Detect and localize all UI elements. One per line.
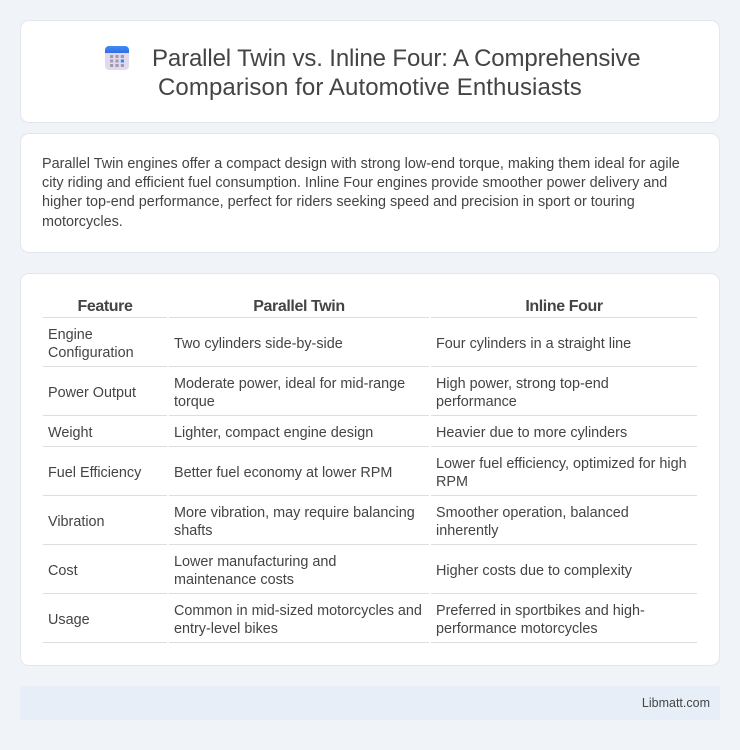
row: Weight: Lighter, compact engine design [174, 425, 373, 441]
row: Fuel Efficiency: Better fuel economy at lower RPM [174, 465, 392, 481]
row: Power Output: High power, strong top-end [436, 376, 609, 392]
row: Usage: performance motorcycles [436, 621, 598, 637]
summary text: Parallel Twin engines offer a compact design with strong low-end torque, making them ideal for agile [42, 156, 680, 172]
row: Power Output: Power Output [48, 385, 136, 401]
row: Usage: Preferred in sportbikes and high- [436, 603, 645, 619]
title panel [20, 20, 720, 123]
title [152, 45, 640, 101]
row: Power Output: performance [436, 394, 517, 410]
row: Engine Configuration: Engine [48, 327, 93, 343]
row: Fuel Efficiency: Fuel Efficiency [48, 465, 141, 481]
icon: calendar [105, 46, 129, 70]
row: Cost: Lower manufacturing and [174, 554, 336, 570]
row: Usage: Common in mid-sized motorcycles and [174, 603, 422, 619]
row: Weight: Weight [48, 425, 93, 441]
row: Vibration: Vibration [48, 514, 105, 530]
table header: Parallel Twin: Parallel Twin [253, 298, 345, 315]
summary text [42, 156, 680, 230]
row: Usage: Usage [48, 612, 90, 628]
row: Engine Configuration: Configuration [48, 345, 134, 361]
summary text: city riding and efficient fuel consumption. Inline Four engines provide smoother power delivery and [42, 175, 667, 191]
row: Vibration: More vibration, may require balancing [174, 505, 415, 521]
row: Power Output: torque [174, 394, 215, 410]
row: Usage [48, 603, 645, 637]
row: Engine Configuration: Four cylinders in a straight line [436, 336, 631, 352]
row: Vibration [48, 505, 629, 539]
comparison table panel [20, 273, 720, 666]
table header: Inline Four: Inline Four [525, 298, 603, 315]
row: Power Output [48, 376, 609, 410]
row: Engine Configuration: Two cylinders side-by-side [174, 336, 343, 352]
row: Usage: entry-level bikes [174, 621, 278, 637]
row: Engine Configuration [48, 327, 631, 361]
row: Weight: Heavier due to more cylinders [436, 425, 627, 441]
row: Cost [48, 554, 632, 588]
summary text: higher top-end performance, perfect for riders seeking speed and precision in sport or touring [42, 194, 635, 210]
row: Cost: Cost [48, 563, 78, 579]
summary panel [20, 133, 720, 253]
row: Fuel Efficiency: RPM [436, 474, 468, 490]
row: Fuel Efficiency: Lower fuel efficiency, optimized for high [436, 456, 687, 472]
summary text: motorcycles. [42, 214, 123, 230]
footer credit: Libmatt.com [642, 696, 710, 710]
table header: Feature: Feature [78, 298, 132, 315]
row: Fuel Efficiency [48, 456, 687, 490]
row: Vibration: inherently [436, 523, 498, 539]
row: Cost: maintenance costs [174, 572, 294, 588]
title: Comparison for Automotive Enthusiasts [158, 74, 582, 101]
title: Parallel Twin vs. Inline Four: A Comprehensive [152, 45, 640, 72]
row: Cost: Higher costs due to complexity [436, 563, 632, 579]
row: Vibration: shafts [174, 523, 212, 539]
row: Power Output: Moderate power, ideal for mid-range [174, 376, 405, 392]
row: Weight [48, 425, 627, 441]
footer bar [20, 686, 720, 720]
row: Vibration: Smoother operation, balanced [436, 505, 629, 521]
